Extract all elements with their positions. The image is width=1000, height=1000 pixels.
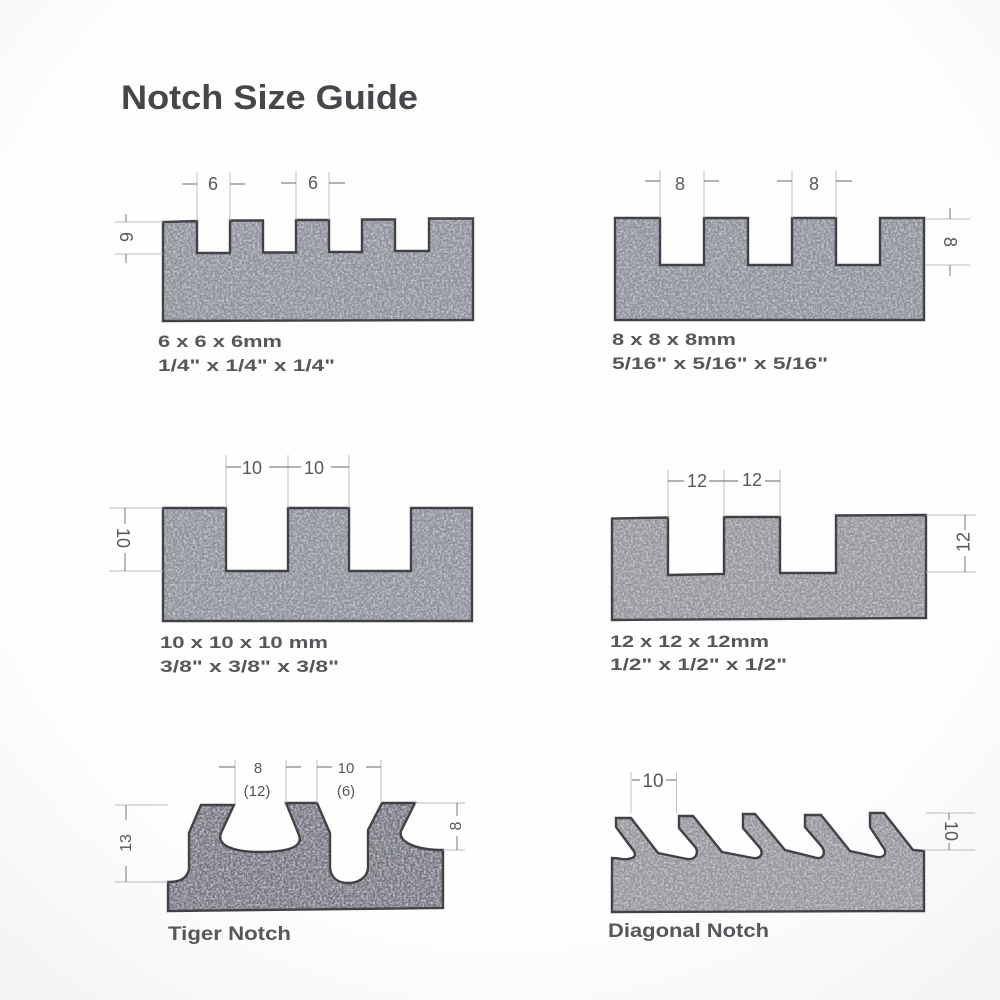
dimension: 10 (6) width: 10 [338, 760, 354, 777]
dimension: 12 depth [926, 515, 976, 572]
dimension: 8 depth [415, 803, 465, 850]
dimension: 8 width second notch [777, 170, 852, 218]
panel: 8mm notch [612, 170, 970, 373]
dimension: 8 (12) width: 8 [254, 760, 262, 777]
dimension: 12 widths: 12 [742, 470, 762, 490]
dimension: 12 widths: 12 [687, 471, 707, 491]
panel: 12mm notch [610, 470, 976, 674]
dimension: 8 (12) width: (12) [244, 783, 270, 800]
label: 6mm sizes: 1/4" x 1/4" x 1/4" [158, 356, 335, 375]
dimension: 8 depth [925, 208, 970, 276]
dimension: 8 depth: 8 [940, 237, 960, 247]
dimension: 10 widths: 10 [304, 458, 324, 478]
dimension: 12 depth: 12 [954, 532, 974, 552]
label: 12mm sizes: 1/2" x 1/2" x 1/2" [610, 655, 787, 674]
dimension: 6 width second notch: 6 [308, 173, 318, 193]
dimension: 10 depth [109, 508, 163, 571]
dimension: 10 widths [226, 455, 349, 508]
dimension: 10 (6) width: (6) [337, 783, 355, 800]
notch profile: diagonal [612, 813, 924, 912]
dimension: 13 depth [115, 805, 168, 882]
dimension: 10 depth [924, 813, 975, 850]
label: 10mm sizes [160, 633, 339, 676]
label: 12mm sizes [610, 632, 787, 674]
panel: 6mm notch [115, 172, 473, 375]
dimension: 12 widths [668, 470, 780, 518]
notch profile: tiger [168, 803, 443, 911]
panel: tiger notch [115, 760, 465, 945]
label: tiger notch: Tiger Notch [168, 924, 291, 945]
label: 8mm sizes: 5/16" x 5/16" x 5/16" [612, 354, 828, 373]
notch profile: 10mm [163, 508, 472, 621]
label: 8mm sizes [612, 330, 828, 373]
dimension: 6 depth: 6 [116, 232, 136, 242]
dimension: 8 width first notch [645, 170, 719, 218]
label: 10mm sizes: 10 x 10 x 10 mm [160, 633, 328, 652]
dimension: 6 width first notch [182, 172, 245, 221]
label: 6mm sizes: 6 x 6 x 6mm [158, 332, 282, 351]
notch profile: 6mm [163, 218, 473, 321]
dimension: 8 width second notch: 8 [809, 174, 819, 194]
label: 12mm sizes: 12 x 12 x 12mm [610, 632, 769, 651]
dimension: 10 depth: 10 [113, 528, 133, 548]
label: 6mm sizes [158, 332, 335, 375]
dimension: 6 width first notch: 6 [208, 174, 218, 194]
dimension: 10 widths: 10 [242, 458, 262, 478]
dimension: 8 width first notch: 8 [675, 174, 685, 194]
panel: 10mm notch [109, 455, 472, 676]
dimension: 10 pitch: 10 [642, 771, 664, 792]
notch profile: 8mm [615, 218, 924, 320]
panel: diagonal notch [608, 771, 975, 942]
dimension: 10 (6) width [317, 760, 381, 803]
label: diagonal notch: Diagonal Notch [608, 921, 769, 942]
notch profile: 12mm [612, 515, 926, 620]
label: 10mm sizes: 3/8" x 3/8" x 3/8" [160, 657, 339, 676]
dimension: 6 depth [115, 214, 163, 263]
dimension: 13 depth: 13 [118, 834, 135, 852]
dimension: 8 (12) width [219, 760, 301, 803]
dimension: 6 width second notch [281, 172, 345, 220]
dimension: 8 depth: 8 [448, 821, 465, 830]
dimension: 10 depth: 10 [941, 821, 961, 841]
label: 8mm sizes: 8 x 8 x 8mm [612, 330, 736, 349]
dimension: 10 pitch [631, 771, 676, 813]
title: Notch Size Guide [121, 79, 418, 117]
